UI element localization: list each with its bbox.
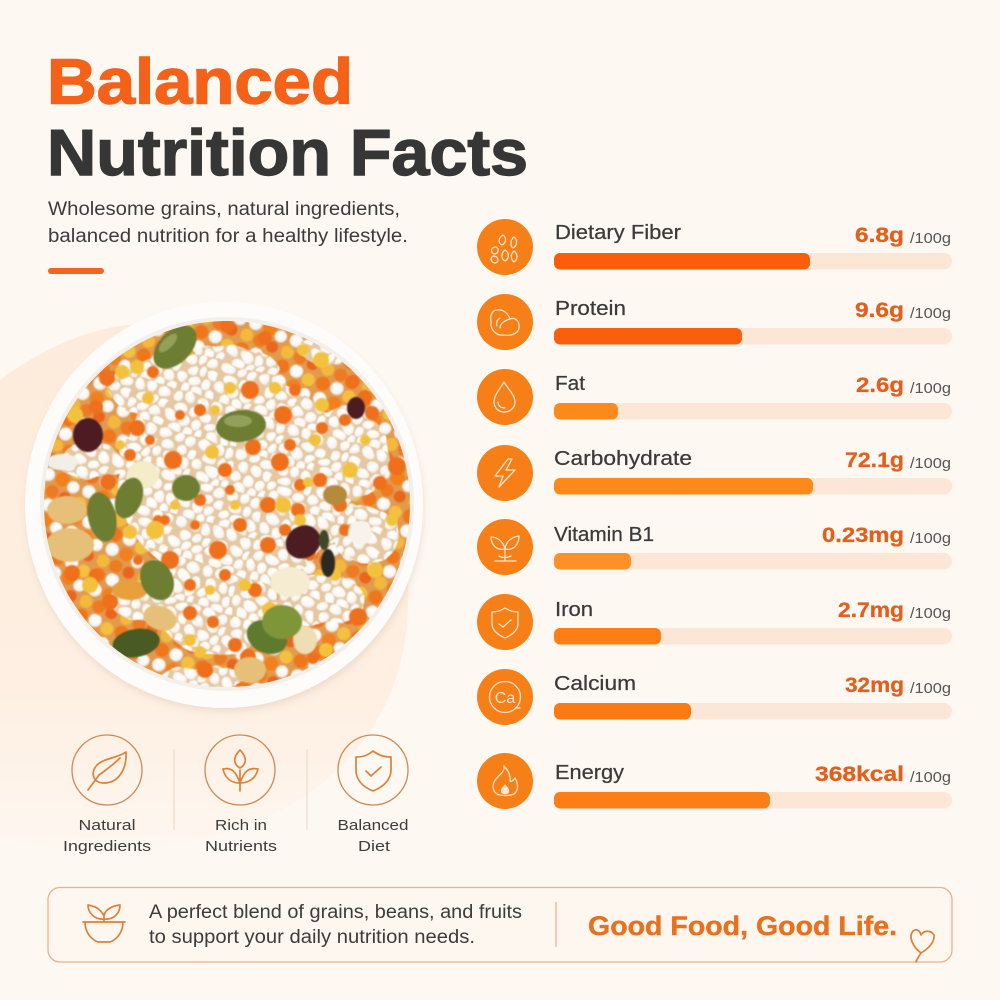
row: protein [477, 294, 952, 350]
slogan: Good Food, Good Life. [588, 911, 897, 941]
dark beans [73, 397, 365, 577]
badge: balanced diet: Diet [358, 838, 391, 855]
footer text: to support your daily nutrition needs. [149, 927, 475, 948]
orange and yellow pieces [64, 319, 406, 678]
badge: rich in nutrients: Nutrients [205, 838, 277, 855]
row: fat: Fat [555, 372, 585, 395]
badge: rich in nutrients: Rich in [215, 817, 267, 834]
food [40, 310, 420, 700]
row: vitamin b1: 0.23mg [822, 524, 904, 547]
row: calcium [477, 669, 952, 725]
icon: oil drop [477, 369, 533, 425]
row: carbohydrate: /100g [910, 455, 951, 472]
icon row [63, 735, 408, 855]
row: carbohydrate [477, 445, 952, 501]
green pumpkin seeds [83, 317, 302, 661]
icon: lightning bolt [477, 445, 533, 501]
row: calcium: Calcium [554, 672, 636, 695]
accent bar [48, 268, 104, 274]
badge: natural ingredients [63, 735, 151, 855]
row: iron: Iron [555, 598, 593, 621]
title: Balanced [47, 46, 353, 118]
title: Nutrition Facts [47, 116, 528, 189]
row: fat [477, 369, 952, 425]
row: fat: /100g [910, 380, 951, 397]
row: carbohydrate: Carbohydrate [554, 447, 692, 470]
subtitle: Wholesome grains, natural ingredients, [48, 199, 400, 220]
row: protein: /100g [910, 305, 951, 322]
bowl rim [25, 302, 423, 711]
row: dietary fiber: Dietary Fiber [555, 221, 681, 244]
row: iron [477, 594, 952, 650]
row: iron: 2.7mg [838, 599, 904, 622]
row: vitamin b1 [477, 519, 952, 575]
row: protein: 9.6g [855, 299, 904, 322]
row: vitamin b1: Vitamin B1 [554, 523, 654, 546]
footer banner [48, 888, 952, 962]
badge: balanced diet [338, 735, 408, 855]
icon: bowl with sprout [83, 905, 125, 942]
badge: rich in nutrients [205, 735, 277, 855]
row: dietary fiber [477, 219, 952, 275]
footer text: A perfect blend of grains, beans, and fruits [149, 902, 522, 923]
row: protein: Protein [555, 297, 626, 320]
icon: calcium symbol: Ca [495, 690, 515, 707]
row: dietary fiber: 6.8g [855, 224, 904, 247]
icon: sprout [477, 519, 533, 575]
icon: heart doodle [911, 930, 934, 962]
subtitle [48, 199, 408, 247]
row: calcium: 32mg [845, 674, 904, 697]
row: energy: Energy [555, 761, 625, 784]
icon: shield check [477, 594, 533, 650]
bowl of grains [25, 302, 423, 711]
subtitle: balanced nutrition for a healthy lifestyle. [48, 226, 408, 247]
row: iron: /100g [910, 605, 951, 622]
icon: wheat grains [477, 219, 533, 275]
row: dietary fiber: /100g [910, 230, 951, 247]
row: carbohydrate: 72.1g [845, 449, 904, 472]
row: energy [477, 753, 952, 809]
background peach blob [0, 324, 408, 850]
footer text [149, 902, 522, 948]
icon: calcium symbol [477, 669, 533, 725]
row: energy: 368kcal [815, 763, 904, 786]
badge: natural ingredients: Ingredients [63, 838, 151, 855]
golden flakes [46, 454, 372, 683]
badge: balanced diet: Balanced [338, 817, 408, 834]
icon: beans [477, 294, 533, 350]
title [47, 46, 528, 189]
row: calcium: /100g [910, 680, 951, 697]
row: vitamin b1: /100g [910, 530, 951, 547]
badge: natural ingredients: Natural [78, 817, 136, 834]
row: fat: 2.6g [856, 374, 904, 397]
row: energy: /100g [910, 769, 951, 786]
icon: flame [477, 753, 533, 809]
